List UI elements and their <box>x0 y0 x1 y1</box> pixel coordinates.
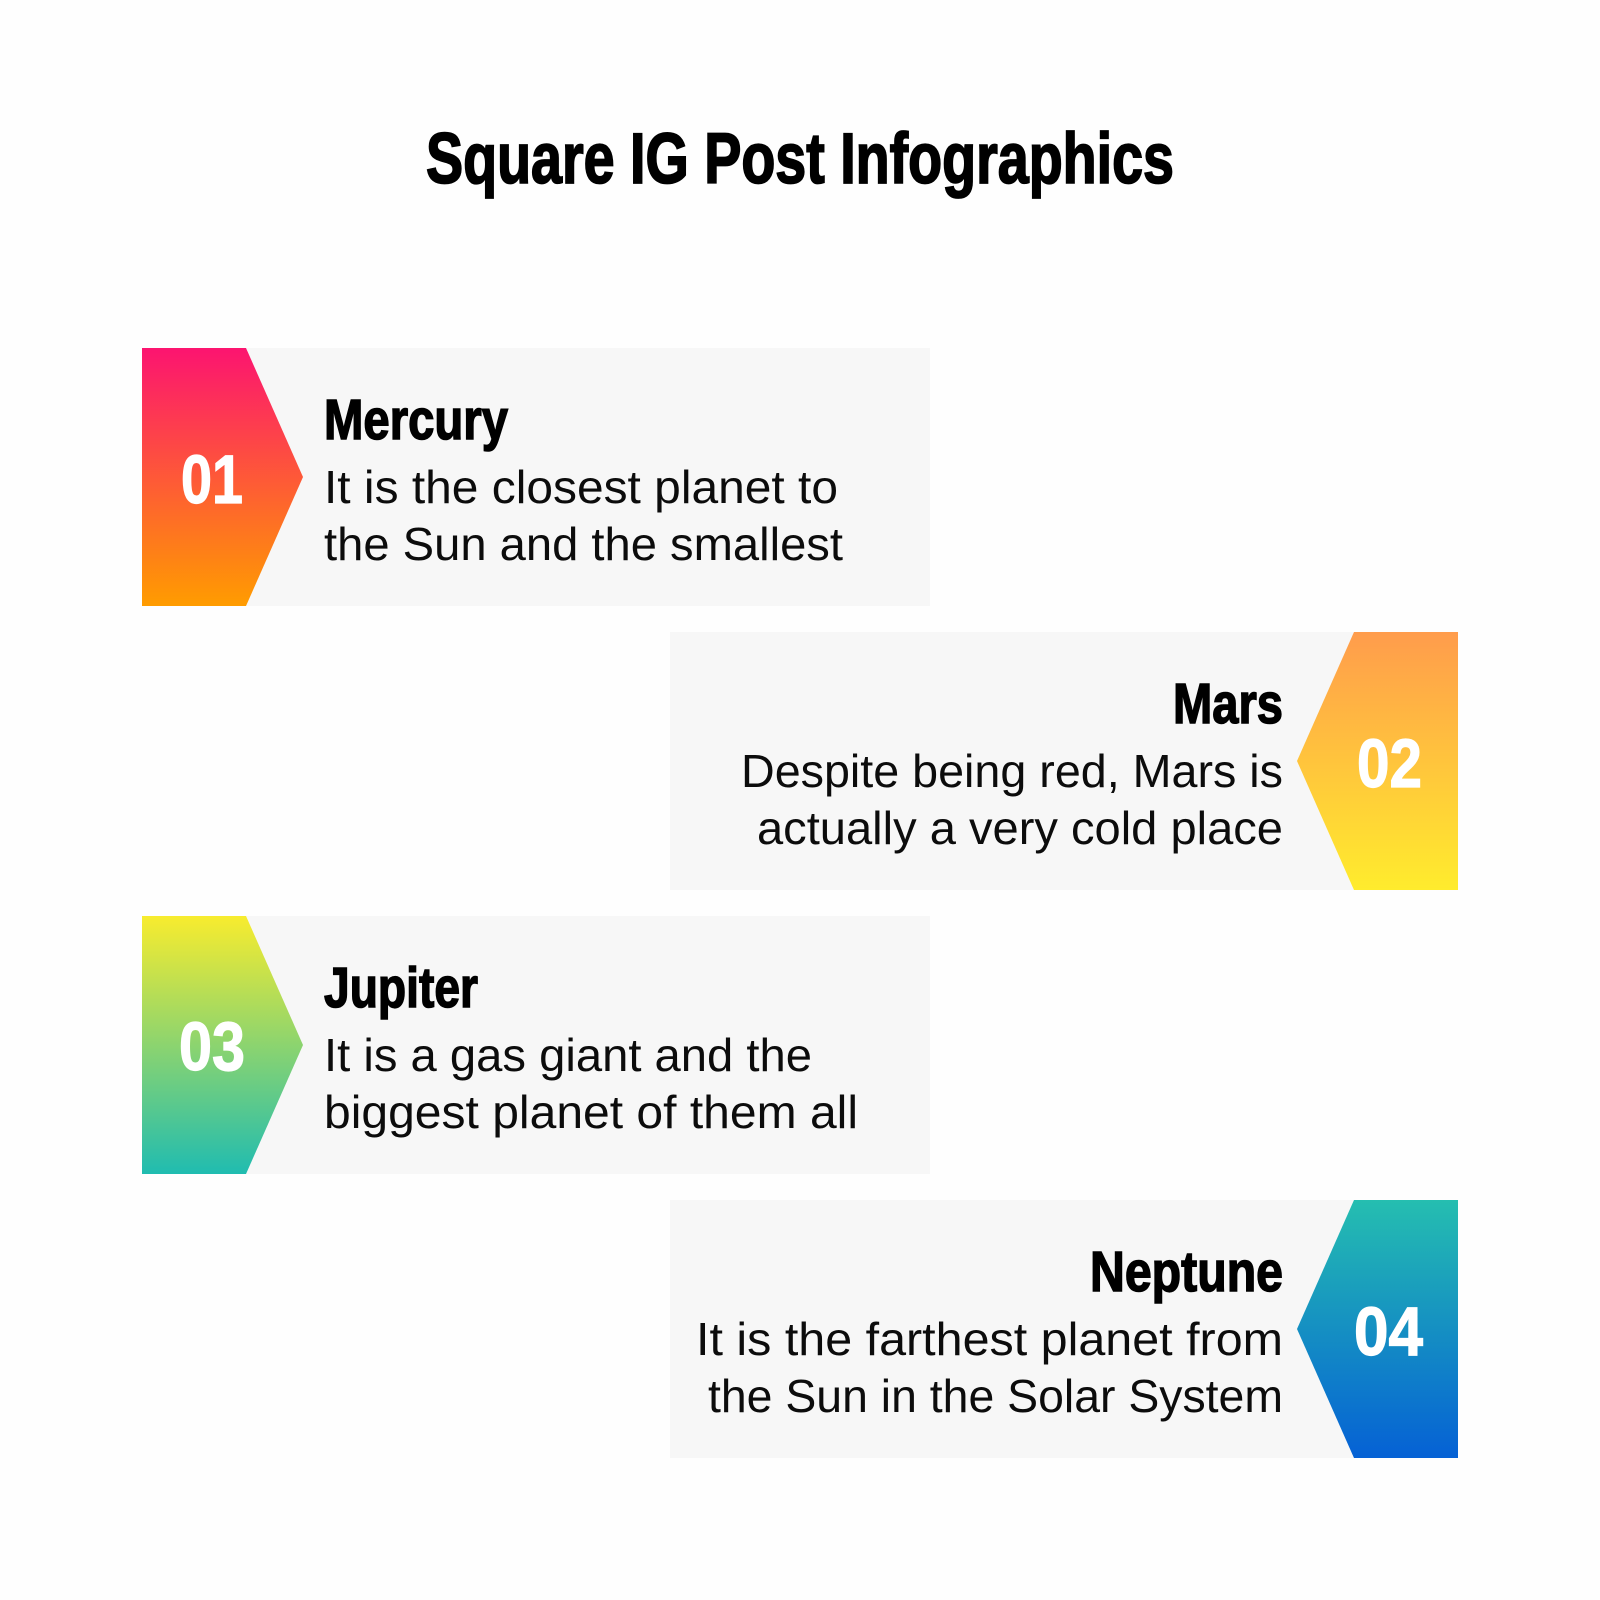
icon: gradient arrow 03 <box>142 916 303 1174</box>
panel: Neptune <box>670 1200 1458 1458</box>
heading: Mars: Mars <box>1173 672 1283 736</box>
text: Mercury description: the Sun and the smallest <box>324 518 843 570</box>
text: Mars description: Despite being red, Mars is <box>741 745 1283 797</box>
text: Jupiter description: It is a gas giant and the <box>324 1029 812 1081</box>
text: Jupiter description: biggest planet of them all <box>324 1086 858 1138</box>
text: Mars description: actually a very cold place <box>757 802 1283 854</box>
number 04: 04 <box>1354 1293 1423 1370</box>
text: Neptune description: It is the farthest planet from <box>696 1313 1283 1365</box>
panel: Jupiter <box>142 916 930 1174</box>
heading: Neptune: Neptune <box>1090 1240 1283 1304</box>
text: Neptune description: the Sun in the Solar System <box>708 1370 1283 1422</box>
text: Neptune description <box>696 1313 1283 1422</box>
text: Mercury description: It is the closest planet to <box>324 461 838 513</box>
text: Jupiter description <box>324 1029 858 1138</box>
icon: gradient arrow 01 <box>142 348 303 606</box>
panel: Mercury <box>142 348 930 606</box>
icon: gradient arrow 04 <box>1297 1200 1458 1458</box>
text: Mercury description <box>324 461 843 570</box>
heading: Jupiter: Jupiter <box>324 956 478 1020</box>
text: Mars description <box>741 745 1283 854</box>
number 01: 01 <box>181 441 243 518</box>
icon: gradient arrow 02 <box>1297 632 1458 890</box>
heading: Mercury: Mercury <box>324 388 508 452</box>
number 03: 03 <box>179 1008 245 1085</box>
title: Square IG Post Infographics <box>426 120 1174 199</box>
panel: Mars <box>670 632 1458 890</box>
number 02: 02 <box>1357 725 1422 802</box>
